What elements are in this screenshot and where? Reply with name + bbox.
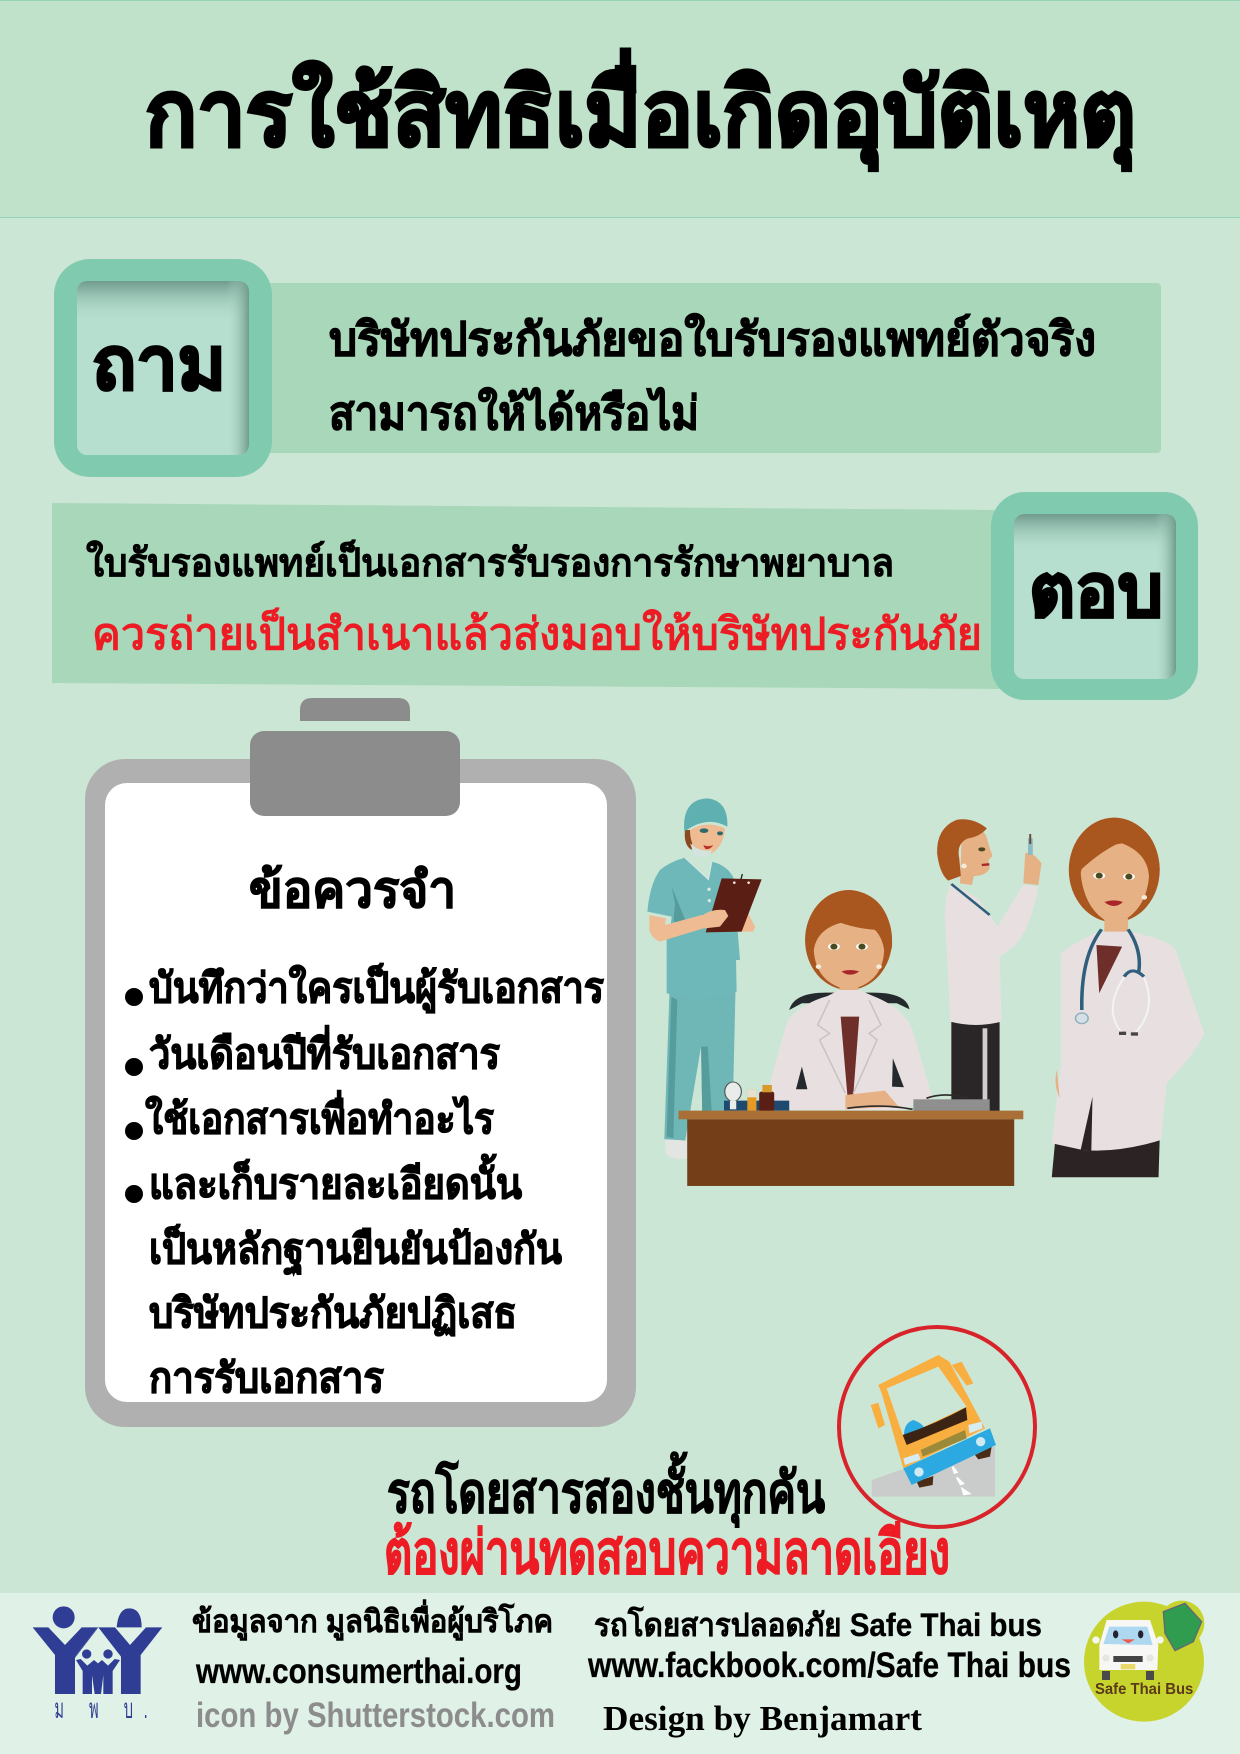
footer source text: www.consumerthai.org — [195, 1652, 522, 1691]
checklist: ใช้เอกสารเพื่อทำอะไร — [145, 1090, 494, 1142]
clipboard heading: ข้อควรจำ — [249, 862, 456, 918]
footer campaign text — [587, 1606, 1071, 1738]
answer text: ใบรับรองแพทย์เป็นเอกสารรับรองการรักษาพยาบาล — [86, 539, 894, 585]
standing doctor figure — [1052, 818, 1204, 1177]
question band — [265, 283, 1161, 453]
desk with items — [679, 1082, 1023, 1186]
footer source text: icon by Shutterstock.com — [196, 1696, 555, 1735]
answer badge — [991, 492, 1198, 700]
seated doctor figure — [766, 890, 932, 1110]
injecting doctor figure — [937, 819, 1041, 1112]
illustration: medical staff — [647, 798, 1204, 1186]
checklist: เป็นหลักฐานยืนยันป้องกัน — [149, 1224, 562, 1276]
checklist: บริษัทประกันภัยปฏิเสธ — [149, 1290, 517, 1336]
footer band — [0, 1593, 1240, 1754]
footer campaign text: รถโดยสารปลอดภัย Safe Thai bus — [594, 1606, 1042, 1643]
answer highlight text: ควรถ่ายเป็นสำเนาแล้วส่งมอบให้บริษัทประกันภัย — [92, 607, 982, 659]
question label: ถาม — [92, 322, 226, 405]
checklist: และเก็บรายละเอียดนั้น — [149, 1154, 522, 1207]
clipboard board — [85, 759, 636, 1427]
footer campaign text: www.fackbook.com/Safe Thai bus — [587, 1646, 1071, 1685]
clipboard clip — [250, 698, 460, 816]
checklist: วันเดือนปีที่รับเอกสาร — [149, 1025, 500, 1077]
logo: consumer foundation: ม พ บ. — [54, 1693, 148, 1724]
title: การใช้สิทธิเมื่อเกิดอุบัติเหตุ — [145, 48, 1136, 171]
logo: consumer foundation — [33, 1606, 162, 1724]
road safety slogan: รถโดยสารสองชั้นทุกคัน — [387, 1452, 825, 1528]
nurse figure — [647, 798, 762, 1159]
checklist — [125, 963, 604, 1401]
checklist: การรับเอกสาร — [149, 1355, 384, 1401]
panel: answer — [52, 492, 1198, 700]
icon: tilted bus in circle — [839, 1327, 1035, 1527]
logo: safe thai bus — [1084, 1601, 1204, 1722]
question badge — [54, 259, 272, 477]
answer band — [52, 503, 1000, 689]
checklist: บันทึกว่าใครเป็นผู้รับเอกสาร — [149, 963, 604, 1014]
footer source text — [192, 1599, 555, 1735]
answer label: ตอบ — [1029, 549, 1163, 632]
panel: clipboard — [85, 698, 636, 1427]
road safety slogan: ต้องผ่านทดสอบความลาดเอียง — [384, 1519, 950, 1586]
footer source text: ข้อมูลจาก มูลนิธิเพื่อผู้บริโภค — [192, 1599, 553, 1641]
road safety slogan — [384, 1452, 950, 1586]
footer campaign text: Design by Benjamart — [603, 1699, 922, 1738]
panel: question — [54, 259, 1161, 477]
question text: สามารถให้ได้หรือไม่ — [329, 386, 699, 439]
question text: บริษัทประกันภัยขอใบรับรองแพทย์ตัวจริง — [329, 312, 1096, 365]
question text — [329, 312, 1096, 439]
header band — [0, 0, 1240, 218]
logo: safe thai bus: Safe Thai Bus — [1095, 1681, 1193, 1698]
